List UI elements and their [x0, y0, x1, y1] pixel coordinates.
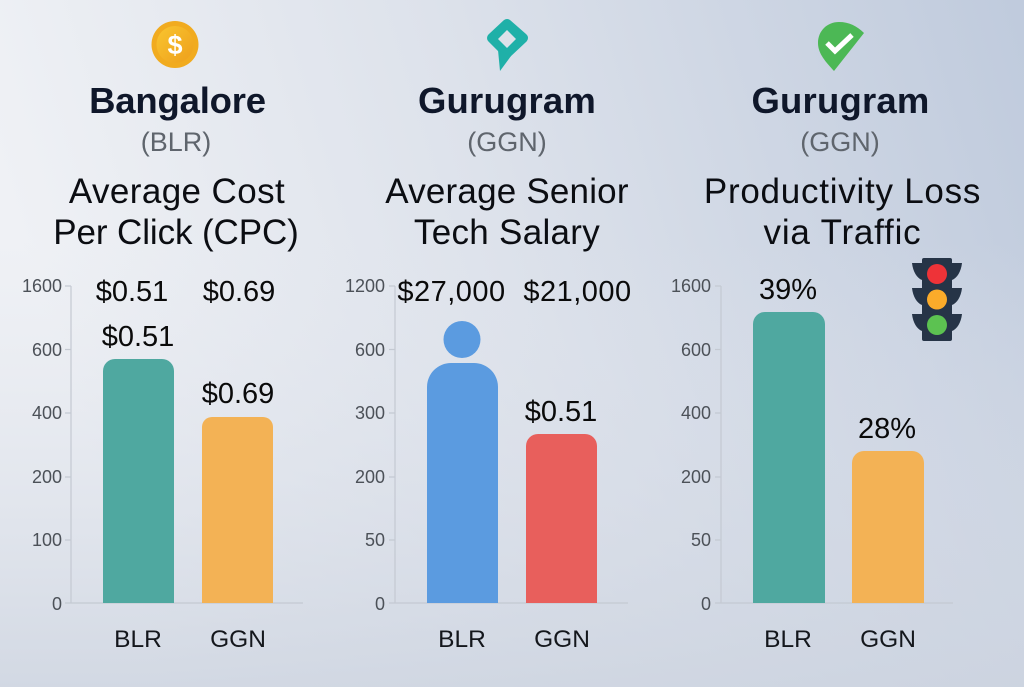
- heading: Bangalore: Bangalore: [89, 80, 266, 121]
- y axis labels: 0: [701, 594, 711, 614]
- metric title: productivity loss via traffic: Productivity Loss: [704, 172, 981, 211]
- category labels: BLR: [438, 626, 486, 653]
- y axis labels: 600: [355, 340, 385, 360]
- category labels: [114, 626, 266, 653]
- y axis labels: 0: [375, 594, 385, 614]
- category labels: [438, 626, 590, 653]
- category labels: GGN: [860, 626, 916, 653]
- y axis labels: [671, 276, 711, 614]
- metric title: productivity loss via traffic: via Traffic: [764, 213, 921, 252]
- icon: person head: [444, 321, 480, 358]
- y axis labels: 100: [32, 530, 62, 550]
- metric title: average senior tech salary: Tech Salary: [414, 213, 600, 252]
- bar: GGN: [202, 417, 273, 603]
- y axis labels: [345, 276, 385, 614]
- category labels: GGN: [210, 626, 266, 653]
- bar: BLR: [103, 359, 174, 603]
- metric title: average cost per click: Average Cost: [69, 172, 285, 211]
- panel: cost per click: [22, 21, 303, 653]
- y axis labels: 400: [32, 403, 62, 423]
- y axis labels: 600: [32, 340, 62, 360]
- icon: green check marker: [818, 22, 864, 71]
- bar chart: cost per click: [22, 276, 303, 653]
- city code: GGN: (GGN): [800, 127, 880, 157]
- bar value: GGN: 28%: [858, 413, 916, 445]
- bar: BLR person body: [427, 363, 498, 603]
- y axis labels: 50: [365, 530, 385, 550]
- icon: teal location marker: [492, 24, 523, 71]
- y axis labels: [22, 276, 62, 614]
- icon: traffic light: [912, 258, 962, 341]
- category labels: BLR: [764, 626, 812, 653]
- y axis labels: 400: [681, 403, 711, 423]
- panel: senior tech salary: [345, 24, 632, 653]
- icon: gold dollar coin: [152, 21, 198, 68]
- top values: $0.69: [203, 276, 275, 308]
- y axis labels: 200: [355, 467, 385, 487]
- y axis labels: 1600: [22, 276, 62, 296]
- metric title: productivity loss via traffic: [704, 172, 981, 252]
- bar: GGN: [526, 434, 597, 603]
- top values: $21,000: [523, 276, 632, 308]
- y axis labels: 200: [681, 467, 711, 487]
- y axis labels: 1600: [671, 276, 711, 296]
- metric title: average cost per click: [53, 172, 299, 252]
- heading: Gurugram: Gurugram: [418, 80, 596, 121]
- bar: BLR: [753, 312, 825, 603]
- metric title: average cost per click: Per Click (CPC): [53, 213, 299, 252]
- bar value: GGN: $0.51: [525, 396, 597, 428]
- y axis labels: 0: [52, 594, 62, 614]
- bar value: BLR: $0.51: [102, 321, 174, 353]
- panel: productivity loss via traffic: [671, 22, 981, 653]
- top values: [397, 276, 632, 308]
- bar chart: senior tech salary: [345, 276, 632, 653]
- top values: $0.51: [96, 276, 168, 308]
- y axis labels: 200: [32, 467, 62, 487]
- city code: BLR: (BLR): [141, 127, 211, 157]
- city code: GGN: (GGN): [467, 127, 547, 157]
- bar chart: productivity loss: [671, 258, 962, 653]
- metric title: average senior tech salary: Average Senior: [385, 172, 629, 211]
- metric title: average senior tech salary: [385, 172, 629, 252]
- y axis labels: 50: [691, 530, 711, 550]
- top values: [96, 276, 275, 308]
- category labels: [764, 626, 916, 653]
- heading: Gurugram: Gurugram: [751, 80, 930, 121]
- y axis labels: 1200: [345, 276, 385, 296]
- top values: $27,000: [397, 276, 506, 308]
- bar value: BLR: 39%: [759, 274, 817, 306]
- icon: gold dollar coin: $: [167, 30, 183, 60]
- y axis labels: 600: [681, 340, 711, 360]
- bar: GGN: [852, 451, 924, 603]
- bar value: GGN: $0.69: [202, 378, 274, 410]
- category labels: GGN: [534, 626, 590, 653]
- y axis labels: 300: [355, 403, 385, 423]
- category labels: BLR: [114, 626, 162, 653]
